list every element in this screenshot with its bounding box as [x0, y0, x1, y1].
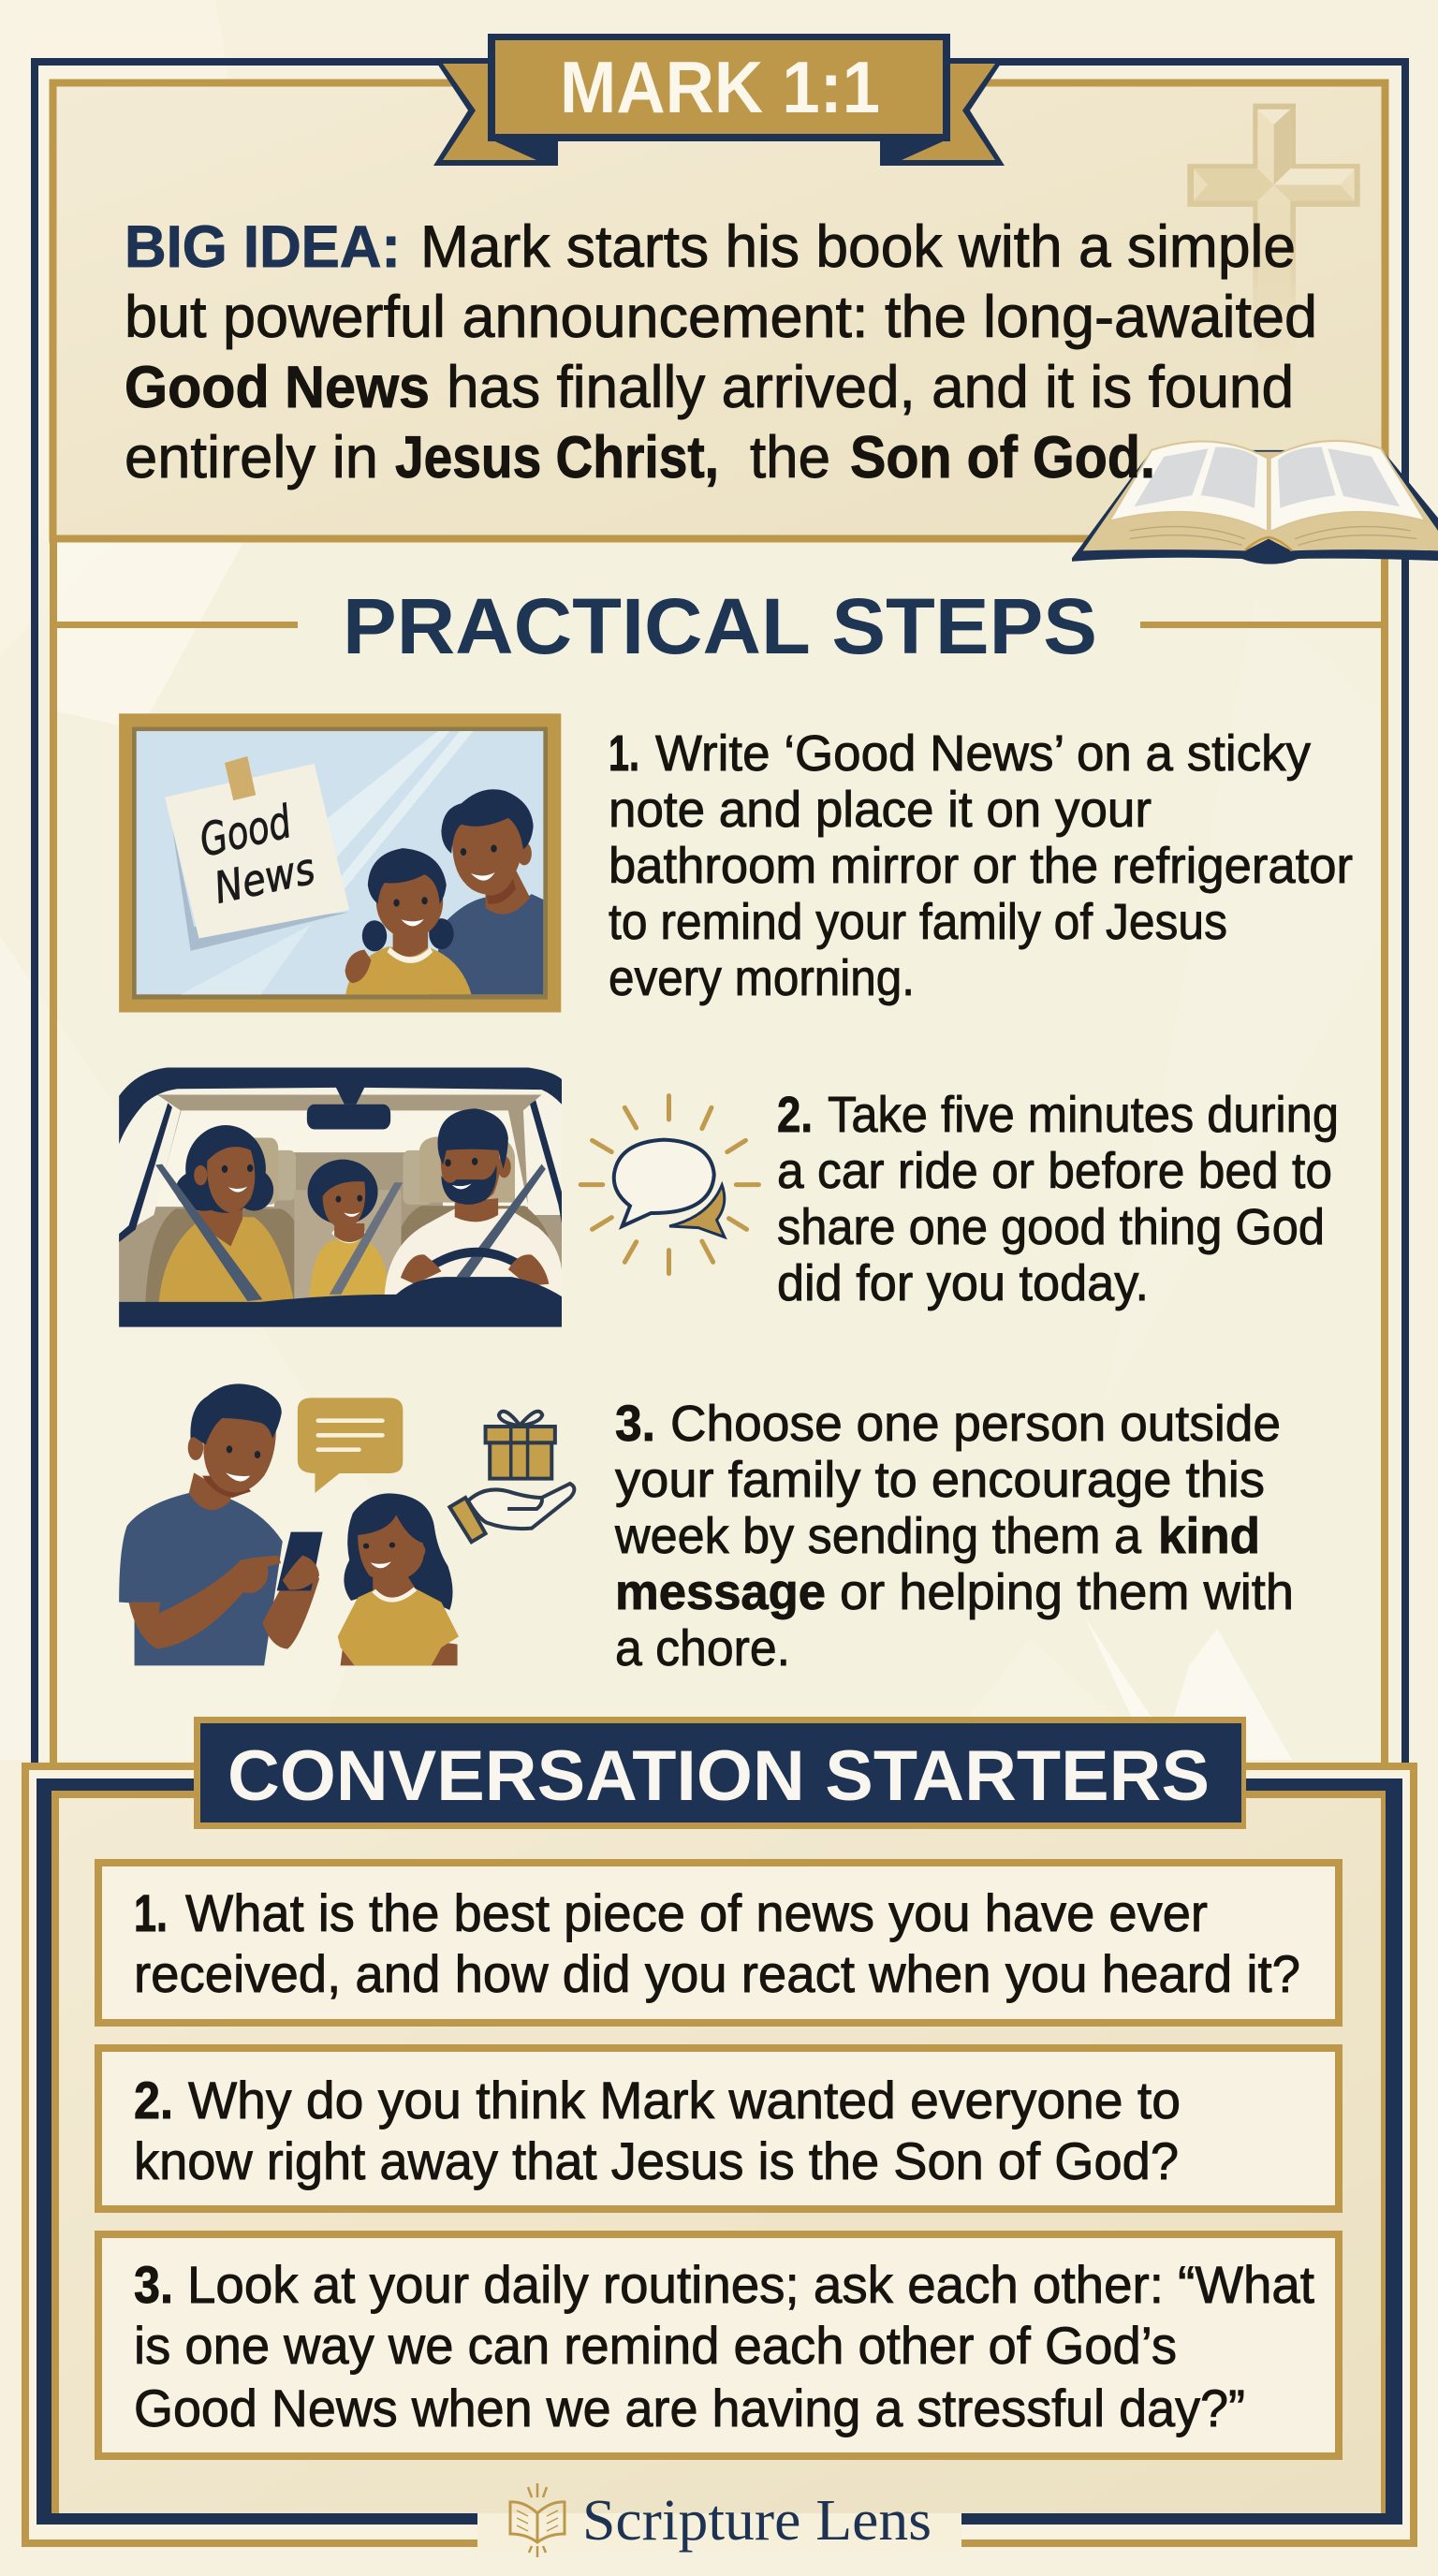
text: big idea: [125, 214, 1317, 490]
footer logo: scripture lens: [477, 2483, 961, 2557]
icon: open bible: [1072, 441, 1438, 564]
question box 1: [98, 1863, 1339, 2023]
text: big idea: Mark starts his book with a simple: [420, 214, 1296, 280]
outer navy frame: [35, 62, 1405, 1763]
question box 3: [98, 2234, 1339, 2456]
icon: speech bubbles with rays: [580, 1096, 758, 1274]
step 3 text: or helping them with: [840, 1564, 1294, 1620]
step 3 illustration: father and daughter with phone, message and gift: [119, 1383, 574, 1665]
heading banner: conversation starters: [194, 1717, 1246, 1829]
step 3 text: kind: [1158, 1508, 1260, 1564]
step 3 text: week by sending them a: [614, 1508, 1142, 1564]
text: big idea: Good News: [125, 355, 430, 420]
step 3 text: a chore.: [615, 1620, 790, 1676]
step 2 text: did for you today.: [777, 1255, 1149, 1311]
heading banner: conversation starters: CONVERSATION STARTERS: [227, 1736, 1210, 1816]
step 1 text: to remind your family of Jesus: [609, 894, 1227, 950]
step 2 text: Take five minutes during: [828, 1087, 1339, 1143]
question box 1: 1.: [134, 1883, 168, 1942]
step 1 text: note and place it on your: [609, 782, 1152, 838]
step 2 illustration: family in car: [119, 1067, 562, 1327]
question box 3: Look at your daily routines; ask each other: “What: [187, 2255, 1314, 2314]
panel: big idea: [52, 82, 1386, 539]
text: big idea: but powerful announcement: the long-awaited: [125, 285, 1317, 350]
footer logo: scripture lens: Scripture Lens: [582, 2489, 932, 2553]
step 2 text: share one good thing God: [777, 1199, 1325, 1255]
text: big idea: has finally arrived, and it is found: [447, 355, 1294, 420]
step 3 text: 3.: [615, 1396, 655, 1452]
step 3 text: Choose one person outside: [670, 1396, 1281, 1452]
sticky note text: Good: [195, 796, 297, 868]
step 3 text: message: [615, 1564, 826, 1620]
step 3 text: your family to encourage this: [615, 1452, 1265, 1508]
step 2 text: a car ride or before bed to: [777, 1143, 1332, 1199]
step 1 text: bathroom mirror or the refrigerator: [609, 838, 1353, 894]
step 1 text: Write ‘Good News’ on a sticky: [655, 725, 1311, 782]
icon: book logo: [510, 2483, 565, 2557]
icon: cross watermark: [1187, 104, 1360, 374]
question box 2: 2.: [134, 2071, 173, 2130]
panel: conversation starters: [22, 1763, 1417, 2547]
question box 1: What is the best piece of news you have ever: [185, 1883, 1208, 1942]
text: big idea: BIG IDEA:: [125, 214, 401, 280]
step 3 text: [614, 1396, 1294, 1676]
text: big idea: Son of God.: [850, 425, 1155, 490]
title text: MARK 1:1: [560, 46, 880, 128]
step 1 illustration: mirror with sticky note and family: News: [210, 842, 319, 914]
question box 2: [98, 2048, 1339, 2209]
heading: practical steps: PRACTICAL STEPS: [343, 582, 1097, 670]
step 1 text: [609, 725, 1353, 1006]
step 2 text: 2.: [777, 1087, 813, 1143]
question box 3: 3.: [134, 2255, 173, 2314]
text: big idea: the: [750, 425, 830, 490]
question box 3: is one way we can remind each other of God’s: [134, 2316, 1177, 2375]
step 1 text: every morning.: [609, 950, 915, 1006]
question box 2: know right away that Jesus is the Son of God?: [134, 2131, 1179, 2190]
question box 1: received, and how did you react when you heard it?: [134, 1944, 1300, 2003]
step 2 text: [777, 1087, 1339, 1311]
step 1 illustration: mirror with sticky note and family: [119, 713, 561, 1013]
heading: practical steps: [56, 582, 1382, 670]
step 1 text: 1.: [609, 725, 639, 782]
question box 2: Why do you think Mark wanted everyone to: [188, 2071, 1181, 2130]
text: big idea: entirely in: [125, 425, 378, 490]
text: big idea: Jesus Christ,: [395, 425, 719, 490]
inner gold side rules: [53, 542, 1385, 1763]
question box 3: Good News when we are having a stressful day?”: [134, 2378, 1245, 2437]
title ribbon: [433, 34, 1005, 166]
